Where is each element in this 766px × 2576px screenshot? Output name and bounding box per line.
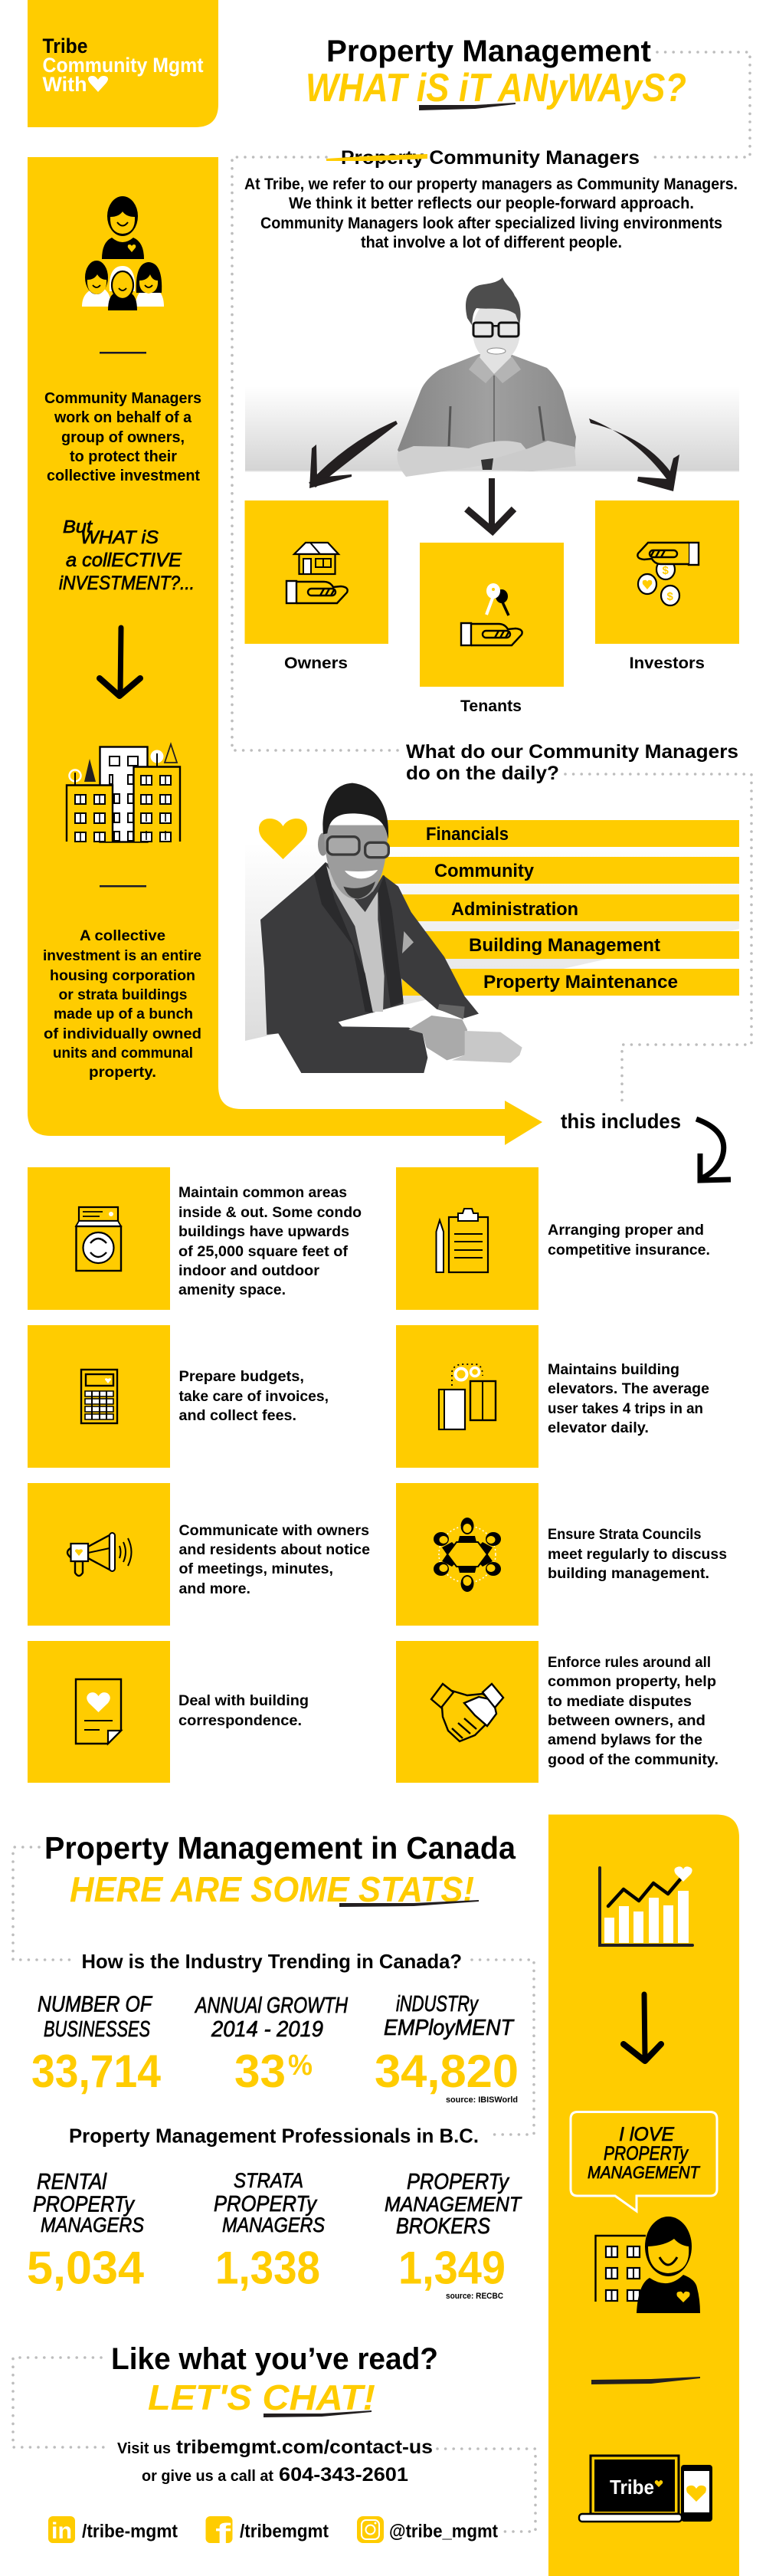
arrow: brush down right panel xyxy=(624,1994,661,2061)
stat: rental property managers: RENTAl xyxy=(37,2170,107,2194)
stat: annual growth xyxy=(194,1994,348,2097)
card: investors: $ xyxy=(666,590,674,603)
social: instagram xyxy=(357,2516,498,2543)
text: community managers work on behalf: work on behalf of a xyxy=(54,409,192,426)
list of duties bars: Building Management xyxy=(469,935,660,956)
text: a collective investment: investment is an entire xyxy=(43,947,201,964)
card: investors: $ xyxy=(662,564,669,577)
service: enforce rules: good of the community. xyxy=(548,1752,719,1768)
arrow: to tenants xyxy=(466,478,514,531)
stat: rental property managers: 5,034 xyxy=(27,2243,145,2293)
heading: what do our community managers do: do on the daily? xyxy=(406,763,559,784)
stat: industry employment: EMPloyMENT xyxy=(384,2016,515,2040)
heading: property community managers: Property Community Managers xyxy=(341,147,640,169)
service: communicate: Communicate with owners xyxy=(179,1523,369,1539)
service: correspondence xyxy=(28,1641,309,1783)
service: elevators: elevators. The average xyxy=(548,1381,709,1397)
handwritten question: iNVESTMENT?... xyxy=(59,573,195,594)
title: Property Management xyxy=(326,34,651,68)
stat: rental property managers xyxy=(27,2170,145,2293)
service: strata councils: meet regularly to discuss xyxy=(548,1547,727,1563)
stat: industry employment: source: IBISWorld xyxy=(446,2095,518,2105)
service: strata councils: building management. xyxy=(548,1566,709,1582)
stat: industry employment: 34,820 xyxy=(375,2046,519,2097)
stat: annual growth: % xyxy=(288,2049,313,2082)
intro paragraph xyxy=(244,176,738,251)
heading: property management in canada xyxy=(44,1830,516,1909)
stat: strata property managers: 1,338 xyxy=(215,2243,320,2293)
icon: laptop and phone: Tribe xyxy=(610,2476,654,2499)
service: elevators xyxy=(396,1325,709,1468)
stat: number of businesses: BUSINESSES xyxy=(44,2017,150,2042)
arrow: to owners xyxy=(309,421,398,488)
social: facebook: /tribemgmt xyxy=(240,2522,329,2542)
service: communicate xyxy=(28,1483,370,1626)
heading: professionals in bc: Property Management Professionals in B.C. xyxy=(69,2125,479,2148)
this includes: this includes xyxy=(561,1110,681,1133)
text: a collective investment: housing corporation xyxy=(50,967,195,984)
service: enforce rules: to mediate disputes xyxy=(548,1694,692,1710)
service: enforce rules: common property, help xyxy=(548,1674,716,1690)
right yellow panel xyxy=(548,1815,739,2576)
logo panel: With xyxy=(43,73,87,96)
photo: community manager with glasses xyxy=(245,277,739,477)
service: enforce rules xyxy=(396,1641,719,1783)
icon: community manager and group xyxy=(82,196,164,310)
heading: like what you've read: LET'S CHAT! xyxy=(148,2377,375,2417)
icon: heart xyxy=(259,819,307,859)
title xyxy=(306,34,686,110)
card: tenants xyxy=(420,543,564,715)
social: linkedin xyxy=(48,2516,178,2544)
service: budgets: and collect fees. xyxy=(179,1408,296,1424)
icon: manager with building xyxy=(596,2217,700,2313)
social: instagram: @tribe_mgmt xyxy=(389,2522,498,2542)
stat: property management brokers: PROPERTy xyxy=(407,2170,509,2194)
card: investors xyxy=(595,500,739,672)
handwritten question xyxy=(59,517,195,594)
text: community managers work on behalf: group of owners, xyxy=(61,428,185,446)
stat: rental property managers: PROPERTy xyxy=(33,2192,135,2217)
handwritten question: But xyxy=(63,517,93,537)
stat: strata property managers xyxy=(214,2169,325,2293)
service: communicate: and residents about notice xyxy=(179,1542,370,1558)
text: a collective investment: property. xyxy=(89,1064,156,1081)
service: insurance: Arranging proper and xyxy=(548,1222,704,1239)
icon: buildings xyxy=(67,744,180,842)
service: insurance: competitive insurance. xyxy=(548,1242,710,1258)
handwritten question: WHAT iS xyxy=(80,527,159,548)
text: a collective investment: made up of a bunch xyxy=(54,1006,193,1022)
arrow: curved brush xyxy=(696,1119,731,1180)
service: common areas: buildings have upwards xyxy=(178,1224,349,1240)
list of duties bars: Financials xyxy=(426,824,509,845)
list of duties bars: Property Maintenance xyxy=(483,972,678,993)
text: community managers work on behalf: collective investment xyxy=(47,467,200,484)
icon: growth chart xyxy=(600,1866,692,1945)
arrow: brush down left panel xyxy=(100,628,140,696)
contact text: 604-343-2601 xyxy=(279,2464,408,2486)
service: correspondence: correspondence. xyxy=(178,1713,302,1729)
speech bubble: i love property management: I lOVE xyxy=(619,2124,674,2145)
handwritten question: a collECTIVE xyxy=(66,550,182,571)
stat: industry employment xyxy=(375,1992,519,2105)
stat: strata property managers: MANAGERS xyxy=(222,2213,325,2236)
logo panel: Community Mgmt xyxy=(43,54,204,77)
stat: strata property managers: PROPERTy xyxy=(214,2192,317,2217)
service: common areas xyxy=(28,1167,362,1310)
heading: like what you've read xyxy=(111,2342,438,2417)
service: communicate: of meetings, minutes, xyxy=(179,1561,333,1577)
card: tenants: Tenants xyxy=(460,697,522,715)
text: community managers work on behalf: Community Managers xyxy=(44,389,201,407)
service: common areas: Maintain common areas xyxy=(178,1185,347,1201)
stat: property management brokers: source: RECBC xyxy=(446,2292,503,2301)
social: facebook xyxy=(205,2516,329,2549)
list of duties bars xyxy=(375,820,739,996)
logo panel: Tribe xyxy=(43,34,87,57)
speech bubble: i love property management: MANAGEMENT xyxy=(588,2163,700,2182)
stat: property management brokers: MANAGEMENT xyxy=(385,2193,522,2216)
heading: industry trending: How is the Industry Trending in Canada? xyxy=(81,1950,462,1973)
text: a collective investment: A collective xyxy=(80,927,165,944)
service: elevators: Maintains building xyxy=(548,1362,679,1378)
photo: smiling community manager in blazer xyxy=(260,783,522,1073)
stat: annual growth: 33 xyxy=(234,2046,286,2097)
stat: rental property managers: MANAGERS xyxy=(41,2213,144,2236)
heading: what do our community managers do: What do our Community Managers xyxy=(406,741,738,763)
intro paragraph: We think it better reflects our people-forward approach. xyxy=(289,195,694,212)
text: a collective investment: units and communal xyxy=(53,1045,193,1062)
service: common areas: indoor and outdoor xyxy=(178,1263,320,1279)
service: budgets: Prepare budgets, xyxy=(179,1369,304,1385)
contact text: or give us a call at xyxy=(142,2468,273,2485)
stat: number of businesses xyxy=(31,1993,162,2097)
speech bubble: i love property management: PROPERTy xyxy=(604,2143,689,2164)
card: investors: Investors xyxy=(630,655,705,672)
intro paragraph: At Tribe, we refer to our property managers as Community Managers. xyxy=(244,176,738,193)
service: elevators: user takes 4 trips in an xyxy=(548,1401,703,1417)
stat: property management brokers xyxy=(385,2170,522,2301)
card: owners: Owners xyxy=(284,655,348,672)
card: owners xyxy=(245,500,388,672)
title: WHAT iS iT ANyWAyS? xyxy=(306,66,686,110)
stat: annual growth: ANNUAl GROWTH xyxy=(194,1994,348,2018)
service: insurance xyxy=(396,1167,710,1310)
stat: strata property managers: STRATA xyxy=(234,2169,303,2192)
list of duties bars: Community xyxy=(434,861,535,881)
service: common areas: amenity space. xyxy=(178,1282,286,1298)
contact text: Visit us xyxy=(117,2440,171,2457)
text: community managers work on behalf: to protect their xyxy=(70,448,177,465)
service: enforce rules: Enforce rules around all xyxy=(548,1655,711,1671)
speech bubble: i love property management xyxy=(571,2112,717,2211)
stat: property management brokers: BROKERS xyxy=(396,2214,491,2239)
service: strata councils xyxy=(396,1483,727,1626)
text: community managers work on behalf xyxy=(44,389,201,484)
arrow: to investors xyxy=(589,418,679,491)
heading: property management in canada: Property Management in Canada xyxy=(44,1830,516,1866)
list of duties bars: Administration xyxy=(451,899,578,920)
stat: annual growth: 2014 - 2019 xyxy=(211,2017,323,2042)
heading: like what you've read: Like what you’ve read? xyxy=(111,2342,438,2376)
service: common areas: of 25,000 square feet of xyxy=(178,1244,349,1260)
intro paragraph: Community Managers look after specialized living environments xyxy=(260,215,722,232)
contact text: tribemgmt.com/contact-us xyxy=(176,2437,433,2458)
stat: industry employment: iNDUSTRy xyxy=(396,1992,479,2016)
background gradient behind photo xyxy=(245,843,739,1041)
service: correspondence: Deal with building xyxy=(178,1693,309,1709)
social: facebook: f xyxy=(215,2518,232,2549)
intro paragraph: that involve a lot of different people. xyxy=(361,234,622,251)
stat: number of businesses: 33,714 xyxy=(31,2046,162,2097)
social: linkedin: /tribe-mgmt xyxy=(82,2522,178,2542)
service: strata councils: Ensure Strata Councils xyxy=(548,1527,702,1543)
stat: number of businesses: NUMBER OF xyxy=(38,1993,153,2017)
heading: property management in canada: HERE ARE SOME STATS! xyxy=(70,1869,474,1909)
contact text xyxy=(117,2437,433,2486)
service: communicate: and more. xyxy=(179,1581,250,1597)
icon: laptop and phone xyxy=(579,2456,712,2522)
service: enforce rules: amend bylaws for the xyxy=(548,1732,702,1748)
text: a collective investment: of individually owned xyxy=(44,1025,201,1042)
service: enforce rules: between owners, and xyxy=(548,1713,705,1729)
logo panel xyxy=(28,0,218,127)
text: a collective investment xyxy=(43,927,201,1081)
service: budgets: take care of invoices, xyxy=(179,1389,329,1405)
brush divider xyxy=(591,2377,700,2384)
left yellow panel with arrow xyxy=(28,157,542,1145)
service: elevators: elevator daily. xyxy=(548,1420,649,1436)
text: a collective investment: or strata buildings xyxy=(58,986,188,1003)
heading: what do our community managers do xyxy=(406,741,738,784)
service: budgets xyxy=(28,1325,329,1468)
stat: property management brokers: 1,349 xyxy=(398,2243,506,2293)
service: common areas: inside & out. Some condo xyxy=(178,1205,362,1221)
social: linkedin: in xyxy=(51,2519,72,2544)
